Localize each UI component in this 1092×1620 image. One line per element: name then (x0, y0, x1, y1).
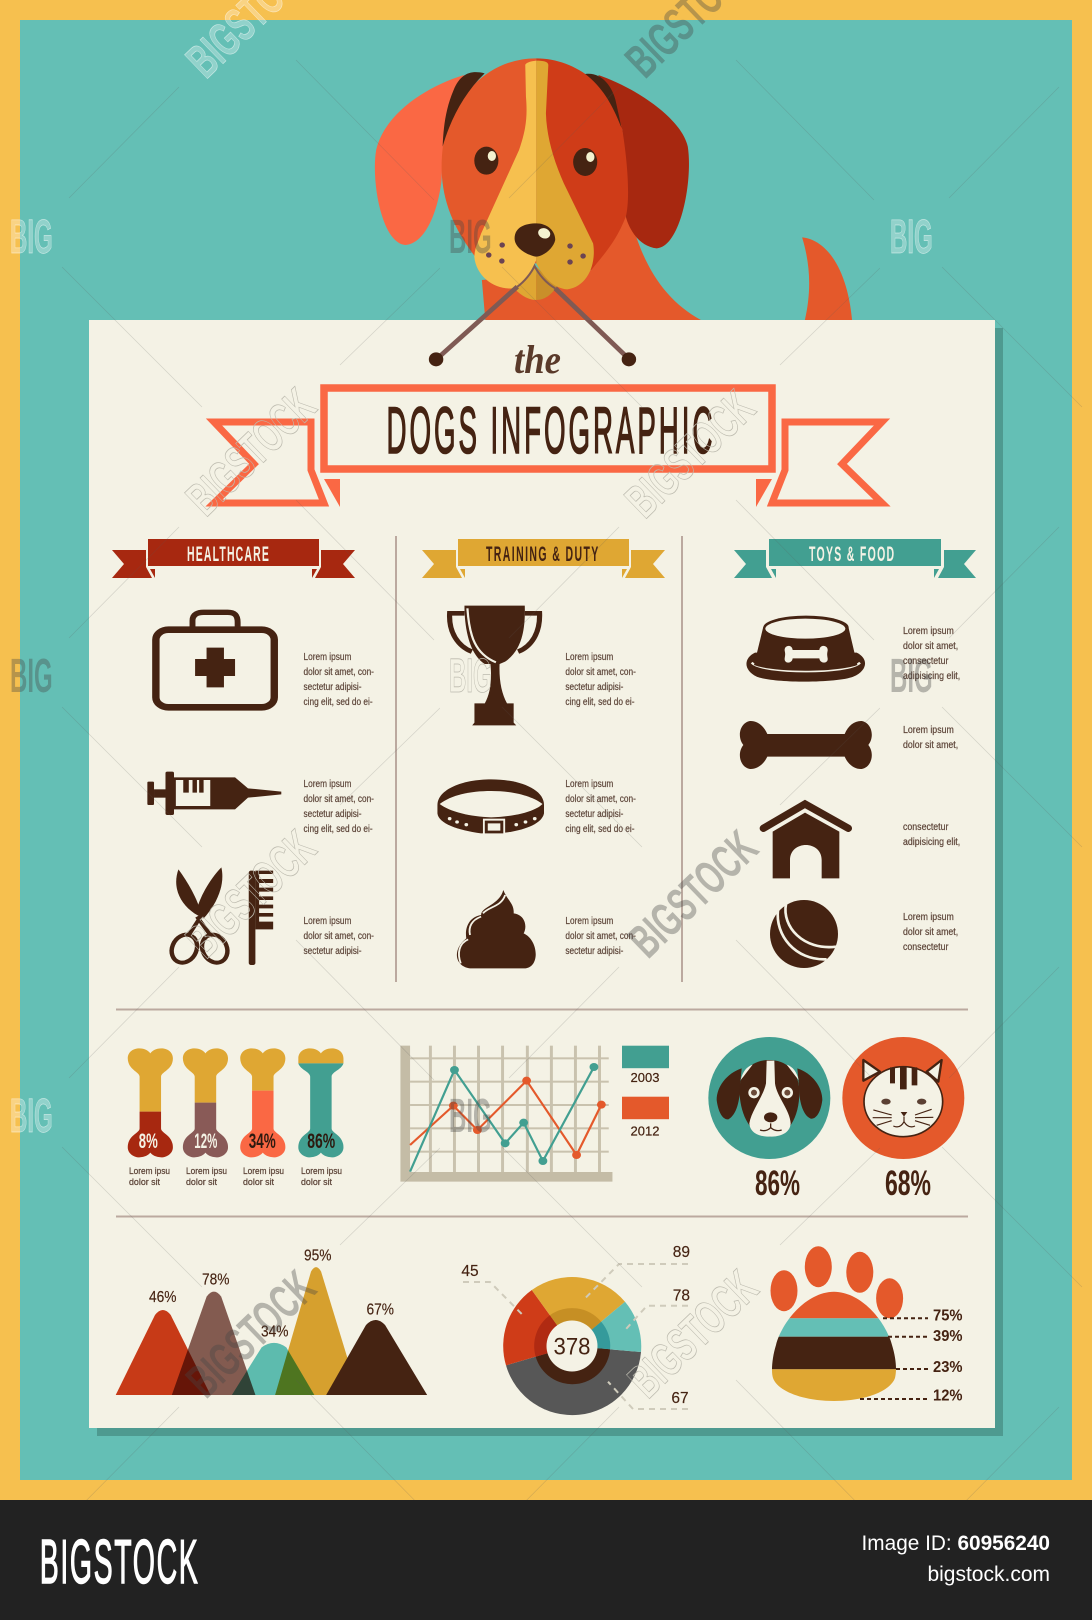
leash strings (436, 287, 629, 359)
bone captions: dolor sit (243, 1177, 274, 1188)
icon: collar (437, 779, 544, 835)
title block (214, 337, 882, 507)
donut center (546, 1320, 598, 1372)
bone gauge 12 percent (183, 1048, 228, 1157)
text: healthcare grooming: sectetur adipisi- (304, 945, 362, 956)
text: toys bone: Lorem ipsum (903, 723, 954, 735)
cat face badge (842, 1037, 964, 1159)
paper card (89, 320, 995, 1428)
watermarks: BIG (449, 650, 492, 703)
section ribbon: toys and food (734, 539, 976, 578)
footer logo: BIGSTOCK (40, 1528, 199, 1597)
mouth line (517, 266, 555, 288)
donut leader lines (463, 1264, 688, 1409)
cat percent: 68% (885, 1164, 931, 1203)
watermarks: BIG (890, 650, 933, 703)
leash pins (429, 352, 636, 366)
watermarks: BIGSTOCK (616, 381, 765, 528)
donut labels: 89 (673, 1244, 690, 1261)
chart grid (410, 1046, 609, 1172)
text: training collar: cing elit, sed do ei- (565, 823, 634, 834)
series 2012 (410, 1077, 606, 1159)
text: toys bone: dolor sit amet, (903, 738, 958, 750)
paw leader dashes (860, 1318, 928, 1399)
paw labels: 12% (933, 1388, 962, 1404)
mountain 34 percent (232, 1343, 314, 1395)
left ribbon tail (214, 422, 324, 503)
watermarks: BIGSTOCK (619, 1261, 768, 1408)
pet circles (708, 1037, 964, 1203)
paw labels: 75% (933, 1308, 962, 1324)
watermarks: BIG (10, 1090, 53, 1143)
bone values (139, 1130, 335, 1153)
text: training collar: sectetur adipisi- (565, 808, 623, 819)
dog illustration (375, 58, 852, 366)
icon: first aid kit (156, 612, 274, 707)
footer bar (0, 1500, 1092, 1620)
chart legend: 2003 (631, 1070, 659, 1085)
paw toes (770, 1246, 903, 1318)
dog head right half (536, 58, 628, 270)
text: training trophy: sectetur adipisi- (565, 681, 623, 692)
bone captions: Lorem ipsu (129, 1166, 170, 1177)
mountain 95 percent (275, 1267, 359, 1395)
text: training trophy: Lorem ipsum (565, 651, 614, 662)
dog tail (802, 237, 852, 320)
bone gauges (128, 1048, 343, 1188)
paw chart (765, 1246, 962, 1404)
paw labels: 39% (933, 1328, 962, 1345)
chin shade (536, 267, 557, 300)
bone captions: dolor sit (186, 1177, 217, 1188)
training label: TRAINING & DUTY (486, 542, 600, 566)
mountain chart (116, 1248, 427, 1395)
muzzle left (474, 61, 536, 288)
series 2003 (410, 1063, 598, 1172)
text: training collar: dolor sit amet, con- (565, 793, 636, 804)
donut labels: 78 (673, 1288, 690, 1304)
text: toys ball: consectetur (903, 940, 948, 952)
watermarks: BIGSTOCK (177, 379, 326, 526)
text: training poop: dolor sit amet, con- (565, 930, 636, 941)
mountain labels: 78% (202, 1272, 230, 1288)
footer image id: Image ID: 60956240 (862, 1532, 1050, 1555)
mountain 78 percent (172, 1292, 255, 1395)
text: toys house: consectetur (903, 820, 948, 832)
bone captions: Lorem ipsu (301, 1166, 342, 1177)
text: training trophy: cing elit, sed do ei- (565, 696, 634, 707)
icons: toys and food (740, 616, 872, 968)
mountain 67 percent (326, 1320, 427, 1395)
text: toys ball: Lorem ipsum (903, 910, 954, 922)
watermarks: BIG (449, 1090, 492, 1143)
icon: bone (740, 721, 872, 769)
text: training poop: Lorem ipsum (565, 915, 614, 926)
text: healthcare grooming: Lorem ipsum (304, 915, 352, 926)
section ribbon: healthcare (112, 539, 355, 578)
dog left ear (375, 75, 464, 245)
icon: syringe (147, 772, 281, 815)
section ribbon: training and duty (422, 539, 665, 578)
bone gauge 86 percent (298, 1048, 343, 1157)
mountain labels (149, 1248, 394, 1340)
text: healthcare first aid: sectetur adipisi- (304, 681, 362, 692)
paw labels: 23% (933, 1359, 962, 1376)
line chart (400, 1046, 669, 1182)
text: healthcare syringe: cing elit, sed do ei- (304, 823, 373, 834)
dog face badge (708, 1037, 830, 1159)
eyes (474, 147, 597, 176)
watermarks: BIGSTOCK (177, 821, 326, 968)
bone captions: Lorem ipsu (243, 1166, 284, 1177)
dark ear folds (443, 72, 622, 147)
bone captions: Lorem ipsu (186, 1166, 227, 1177)
donut outer segments (503, 1277, 641, 1415)
paw pad stripes (772, 1292, 896, 1401)
donut chart (461, 1244, 690, 1415)
text: toys bowl: adipisicing elit, (903, 669, 960, 681)
dog head left half (442, 58, 536, 263)
mountain labels: 46% (149, 1289, 177, 1306)
chin (514, 267, 536, 300)
whisker dots (486, 242, 586, 265)
text: healthcare first aid: cing elit, sed do ei- (304, 696, 373, 707)
donut labels: 45 (461, 1263, 479, 1280)
icon: food bowl (746, 616, 865, 682)
watermarks: BIGSTOCK (619, 821, 768, 968)
watermarks (10, 0, 933, 1408)
text: healthcare grooming: dolor sit amet, con- (304, 930, 374, 941)
bone values: 8% (139, 1130, 158, 1153)
card shadow (97, 328, 1003, 1436)
donut inner segments (534, 1308, 610, 1384)
text: toys ball: dolor sit amet, (903, 925, 958, 937)
bone values: 12% (194, 1130, 217, 1153)
text: training collar: Lorem ipsum (565, 778, 614, 789)
chart legend: 2012 (631, 1124, 659, 1138)
title text: DOGS INFOGRAPHIC (386, 393, 715, 467)
text: healthcare first aid: Lorem ipsum (304, 651, 352, 662)
nose (515, 223, 555, 257)
bone values: 86% (307, 1130, 335, 1153)
paw labels (933, 1308, 962, 1404)
nose highlight (536, 226, 552, 240)
icon: scissors (167, 867, 232, 966)
mountain 46 percent (116, 1310, 211, 1395)
the script word: the (514, 337, 561, 382)
text: training trophy: dolor sit amet, con- (565, 666, 636, 677)
text: toys bowl: dolor sit amet, (903, 639, 958, 651)
text: healthcare syringe: dolor sit amet, con- (304, 793, 374, 804)
watermarks: BIGSTOCK (177, 1261, 326, 1408)
donut total: 378 (554, 1334, 590, 1360)
icon: comb (249, 871, 273, 965)
mountain labels: 95% (304, 1248, 332, 1264)
text: toys bowl: Lorem ipsum (903, 624, 954, 636)
chart legend (622, 1046, 669, 1138)
donut labels (461, 1244, 690, 1407)
icon: dog house (763, 804, 848, 878)
donut labels: 67 (671, 1390, 689, 1407)
chart axes (400, 1046, 612, 1182)
right ribbon tail (772, 422, 882, 503)
watermarks: BIG (449, 211, 492, 264)
text: toys house: adipisicing elit, (903, 835, 960, 847)
watermarks: BIG (10, 211, 53, 264)
bone captions: dolor sit (301, 1177, 332, 1188)
toys label: TOYS & FOOD (809, 542, 895, 566)
bone gauge 8 percent (128, 1048, 173, 1157)
bone gauge 34 percent (240, 1048, 285, 1157)
dog right ear (598, 75, 689, 248)
mountain labels: 67% (366, 1302, 394, 1318)
text: healthcare syringe: sectetur adipisi- (304, 808, 362, 819)
text: healthcare syringe: Lorem ipsum (304, 778, 352, 789)
watermarks: BIG (890, 211, 933, 264)
icon: poop (457, 890, 536, 968)
title frame (324, 388, 772, 469)
icon: trophy (450, 606, 540, 725)
dog percent: 86% (755, 1164, 800, 1203)
icons: healthcare and training (147, 606, 544, 968)
text: healthcare first aid: dolor sit amet, con- (304, 666, 374, 677)
bone captions: dolor sit (129, 1177, 160, 1188)
bone values: 34% (249, 1130, 276, 1153)
dog body (482, 217, 701, 320)
healthcare label: HEALTHCARE (187, 542, 270, 566)
text: training poop: sectetur adipisi- (565, 945, 623, 956)
ribbon folds (324, 479, 772, 507)
watermarks: BIG (10, 650, 53, 703)
footer url: bigstock.com (927, 1563, 1050, 1586)
bone captions (129, 1166, 342, 1188)
icon: ball (770, 900, 838, 968)
muzzle right (536, 61, 594, 289)
mountain labels: 34% (261, 1324, 289, 1340)
text: toys bowl: consectetur (903, 654, 948, 666)
